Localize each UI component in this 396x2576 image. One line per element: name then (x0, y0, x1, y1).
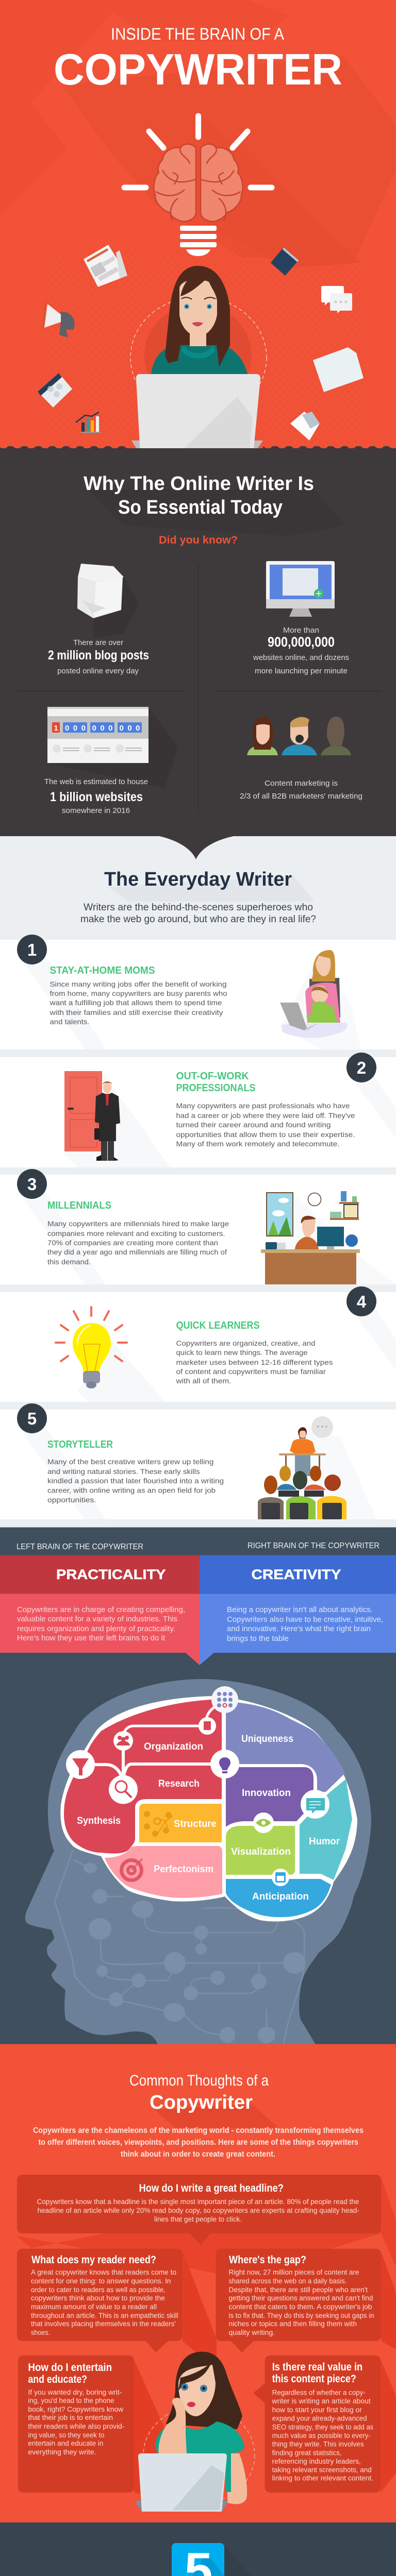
illustration: office desk (261, 1191, 360, 1284)
thought bubble: reader need: A great copywriter knows that readers come to (31, 2268, 176, 2276)
icon: megaphone (42, 301, 74, 337)
icon: paper stack (77, 564, 139, 639)
icon: calendar (38, 373, 72, 408)
text (175, 1320, 333, 1385)
heading: The Everyday Writer (104, 869, 292, 890)
thought bubble: the gap: is to fix that. They do this by seeking out gaps in (229, 2312, 374, 2319)
label: left brain: LEFT BRAIN OF THE COPYWRITER (16, 1543, 143, 1551)
chart: brain map (60, 1686, 357, 1922)
text: opportunities. (47, 1496, 96, 1504)
thought bubble: entertain: their readers while also provid- (28, 2422, 124, 2430)
illustration: thinking woman (135, 2352, 255, 2512)
icon: laptop (135, 2453, 228, 2512)
panel: millennials (0, 1169, 396, 1284)
thought bubble: the gap: quality writing. (229, 2329, 275, 2336)
text: marketer uses between 12-16 different types (176, 1358, 333, 1366)
box: creativity: brings to the table (227, 1634, 289, 1643)
region: structure (139, 1804, 222, 1842)
badge 5: 5 (27, 1409, 37, 1428)
icon: browser counter: 000 (65, 724, 86, 733)
icon: brain (154, 144, 243, 222)
illustration: speaker and audience (258, 1416, 346, 1519)
circuit lines (55, 1850, 304, 2044)
badge 2: 2 (357, 1058, 366, 1077)
text: with their families and still exercise their creativity (49, 1008, 223, 1016)
icon: browser counter: 000 (120, 724, 140, 733)
icon: yellow bulb (56, 1307, 127, 1388)
thought bubble: entertain: ing value, so they seek to (28, 2431, 104, 2439)
illustration: man at door (64, 1071, 120, 1161)
stat: websites: more launching per minute (255, 667, 348, 675)
text: STAY-AT-HOME MOMS (50, 965, 155, 976)
text: and talents. (50, 1018, 90, 1026)
thought bubble: reader need: maximum amount of value to a reader all (31, 2303, 157, 2311)
thought bubble: the gap: content that caters to them. A copywriter's job (229, 2303, 372, 2311)
panel: hero (0, 0, 396, 455)
thought bubble: real value: referencing industry leaders, (272, 2458, 361, 2465)
thought bubble: reader need: content for one thing: to answer questions. In (31, 2277, 171, 2285)
badge 3 (17, 1169, 47, 1199)
thought bubble: real value: Is there real value in (272, 2361, 362, 2373)
stat: blog posts: 2 million blog posts (48, 648, 149, 663)
stat: websites: More than (283, 626, 319, 635)
stat: websites: websites online, and dozens (253, 654, 349, 662)
icon: notebook (271, 247, 299, 276)
text: and writing natural stories. These early skills (47, 1467, 200, 1476)
box: creativity (200, 1555, 396, 1665)
text: from home, many copywriters are busy parents who (50, 989, 227, 997)
text: had a career or job where they were laid off. They've (176, 1111, 355, 1120)
thought bubble: headline: headline of an article while only 20% read body copy, so copywriters are experts at crafting quality head- (37, 2207, 359, 2214)
badge 3: 3 (27, 1175, 37, 1194)
badge 5 (17, 1403, 47, 1433)
box: creativity: CREATIVITY (252, 1567, 341, 1582)
thought bubble: the gap (216, 2249, 381, 2352)
thought bubble: real value: taking relevant screenshots, and (272, 2466, 372, 2474)
icon: browser counter (47, 707, 178, 788)
box: creativity: Copywriters also have to be creative, intuitive, (227, 1615, 383, 1624)
text: opportunities that allow them to use their expertise. (176, 1130, 355, 1139)
brain labels: Visualization (231, 1846, 291, 1857)
heading: So Essential Today (118, 497, 283, 518)
thought bubble: real value: expand your already-advanced (272, 2415, 367, 2422)
brain labels: Perfectonism (154, 1864, 213, 1875)
intro text (80, 902, 316, 925)
icon: lightbulb base (180, 226, 217, 256)
region: anticipation (226, 1879, 331, 1917)
region: synthesis organization research (64, 1699, 222, 1854)
heading: Why The Online Writer Is (84, 473, 314, 495)
text: companies more relevant and exciting to customers. (47, 1229, 225, 1238)
box: practicality: Copywriters are in charge of creating compelling, (17, 1605, 185, 1614)
text: MILLENNIALS (47, 1200, 111, 1211)
panel: stay-at-home moms (0, 935, 396, 1049)
box: practicality: PRACTICALITY (56, 1567, 166, 1582)
text: OUT-OF-WORK (176, 1071, 249, 1082)
panel: out-of-work professionals (0, 1053, 396, 1167)
thought bubble: reader need: What does my reader need? (31, 2254, 156, 2266)
thought bubble: the gap: getting their questions answered and can't find (229, 2294, 373, 2302)
text: this demand. (47, 1258, 91, 1266)
icon: laptop (131, 374, 263, 455)
stat: billion websites: The web is estimated to house (44, 778, 148, 786)
icon: bar chart (76, 412, 101, 433)
brain labels: Uniqueness (241, 1734, 293, 1744)
region: humor (300, 1779, 352, 1880)
thought bubble: the gap: Right now, 27 million pieces of content are (229, 2268, 359, 2276)
heading (84, 473, 314, 518)
text: with all of them. (175, 1377, 231, 1385)
illustration: head silhouette (25, 1679, 371, 2044)
stat: websites (253, 626, 349, 675)
stat: billion websites: 1 billion websites (50, 790, 143, 804)
region: innovation (226, 1767, 314, 1827)
thought bubble: real value: writer is writing an article about (272, 2397, 371, 2405)
text (176, 1071, 355, 1148)
text: QUICK LEARNERS (176, 1320, 260, 1331)
thought bubble: entertain: book, right? Copywriters know (28, 2405, 123, 2413)
intro text: make the web go around, but who are they in real life? (80, 914, 316, 925)
title: INSIDE THE BRAIN OF A (111, 25, 285, 43)
box: practicality: requires organization and plenty of practicality. (17, 1624, 175, 1633)
brain labels: Organization (144, 1741, 203, 1752)
text: career, with online writing as an open field for job (47, 1486, 216, 1494)
brain labels: Anticipation (252, 1891, 309, 1902)
icon: number tile (172, 2542, 224, 2576)
icon: three people (247, 717, 351, 755)
thought bubble: real value (253, 2355, 381, 2493)
text: Many copywriters are past professionals who have (176, 1101, 350, 1110)
title: COPYWRITER (54, 45, 342, 94)
thought bubble: the gap: Where's the gap? (229, 2254, 306, 2266)
intro text: Writers are the behind-the-scenes superheroes who (84, 902, 313, 913)
text: kindled a passion that later flourished into a writing (47, 1477, 224, 1485)
box: creativity: Being a copywriter isn't all about analytics. (227, 1605, 373, 1614)
thought bubble: headline: lines that get people to click. (154, 2215, 242, 2223)
text: of content and copywriters must be familiar (176, 1367, 326, 1376)
region: uniqueness (226, 1702, 345, 1792)
text: PROFESSIONALS (176, 1082, 256, 1094)
text: 70% of companies are creating more content than (47, 1239, 218, 1247)
icon: note page (313, 347, 364, 392)
badge 2 (346, 1053, 376, 1082)
thought bubble: reader need (17, 2249, 183, 2352)
thought bubble: headline: Copywriters know that a headline is the single most important piece of an article. 80% of people read the (37, 2198, 359, 2206)
icon: woman at laptop (131, 266, 263, 455)
heading: Common Thoughts of a (129, 2072, 269, 2089)
text: Since many writing jobs offer the benefit of working (50, 980, 227, 988)
thought bubble: headline (17, 2175, 381, 2245)
panel: quick learners (0, 1286, 396, 1402)
thought bubble: reader need: that involves placing themselves in the readers' (31, 2320, 176, 2328)
box: practicality: valuable content for a variety of industries. This (17, 1615, 177, 1623)
thought bubble: the gap: niches or topics and then filling them with (229, 2320, 357, 2328)
icon: dashed halo (130, 297, 267, 418)
text: STORYTELLER (47, 1439, 113, 1450)
thought bubble: entertain: ing, you'd head to the phone (28, 2397, 114, 2404)
stat: content marketing: 2/3 of all B2B marketers' marketing (240, 792, 362, 801)
thought bubble: real value: finding great statistics, (272, 2449, 342, 2457)
badge 4: 4 (357, 1292, 367, 1311)
thought bubble: reader need: throughout an article. This is an empathetic skill (31, 2312, 178, 2319)
illustration: mom and baby (280, 950, 347, 1038)
thought bubble: entertain: If you wanted dry, boring writ- (28, 2388, 122, 2396)
thought bubble: real value: Regardless of whether a copy- (272, 2389, 366, 2397)
icon: rolled paper (290, 412, 320, 440)
icon: lightbulb rays (124, 116, 272, 188)
stat: websites: 900,000,000 (268, 634, 335, 650)
region: perfectonism (105, 1846, 222, 1898)
box: practicality: Here's how they use their left brains to do it (17, 1634, 166, 1642)
stat: blog posts: posted online every day (57, 667, 139, 675)
intro text: Copywriters are the chameleons of the marketing world - constantly transforming themselves (33, 2126, 364, 2135)
thought bubble: entertain: entertain and educate in (28, 2439, 103, 2447)
thought bubble: reader need: order to cater to readers as well as possible, (31, 2286, 166, 2294)
thought bubble: real value: how to start your first blog or (272, 2406, 362, 2414)
stat: blog posts: There are over (73, 639, 123, 647)
thought bubble: real value: much value as possible to every- (272, 2432, 371, 2439)
text: Many copywriters are millennials hired to make large (47, 1219, 229, 1228)
stat: billion websites: somewhere in 2016 (62, 807, 130, 815)
text (47, 1200, 229, 1266)
text: Many of them work remotely and telecommute. (176, 1140, 339, 1148)
text: want a fulfilling job that allows them to spend time (49, 998, 222, 1007)
icon: newspaper (84, 245, 127, 287)
text: Many of the best creative writers grew up telling (47, 1458, 213, 1466)
text (49, 965, 227, 1026)
thought bubble: reader need: shoes. (31, 2329, 50, 2336)
brain labels: Innovation (242, 1788, 291, 1799)
brain labels: Humor (309, 1836, 340, 1847)
badge 4 (346, 1286, 376, 1316)
subheading: Did you know? (159, 534, 238, 546)
thought bubble: headline: How do I write a great headline? (139, 2182, 284, 2194)
panel: common thoughts (0, 2044, 396, 2522)
text: quick to learn new things. The average (176, 1348, 308, 1357)
panel: why the online writer (0, 446, 396, 836)
region: visualization (226, 1826, 295, 1875)
intro text (33, 2126, 364, 2159)
stat: blog posts (48, 639, 149, 675)
text: they did a year ago and millennials are filling much of (47, 1248, 227, 1256)
brain labels: Structure (174, 1819, 217, 1829)
brain labels (77, 1734, 340, 1902)
box: creativity: and innovative. Here's what the right brain (227, 1624, 371, 1633)
thought bubble: the gap: Despite that, there are still people who aren't (229, 2286, 368, 2294)
panel: storyteller (0, 1403, 396, 1519)
panel: key techniques header (0, 2522, 396, 2576)
title (54, 25, 342, 94)
intro text: think about in order to create great content. (121, 2150, 275, 2159)
badge 1 (17, 935, 47, 964)
text (47, 1439, 224, 1504)
stat: billion websites (44, 778, 148, 815)
box: practicality (0, 1555, 200, 1665)
thought bubble: entertain: and educate? (28, 2374, 87, 2385)
thought bubble: entertain (18, 2355, 134, 2493)
text: turned their career around and found writing (176, 1121, 331, 1129)
brain labels: Research (158, 1778, 200, 1789)
label: right brain: RIGHT BRAIN OF THE COPYWRITER (248, 1541, 380, 1550)
icon: chat bubbles (321, 286, 352, 313)
panel: left and right brain (0, 1527, 396, 2044)
thought bubble: real value: SEO strategy, they seek to add as (272, 2424, 373, 2431)
badge 1: 1 (27, 940, 37, 959)
thought bubble: real value: thing they write. This involves (272, 2441, 364, 2448)
thought bubble: reader need: copywriters think about how to provide the (31, 2294, 165, 2302)
brain icons (66, 1686, 329, 1886)
brain labels: Synthesis (77, 1816, 121, 1826)
heading (129, 2072, 269, 2113)
icon: browser counter: 1 (54, 724, 58, 733)
thought bubble: entertain: everything they write. (28, 2448, 96, 2456)
intro text: to offer different voices, viewpoints, and positions. Here are some of the things copywriters (38, 2138, 358, 2147)
icon: monitor (266, 561, 335, 617)
thought bubble: real value: linking to other relevant content. (272, 2475, 373, 2482)
thought bubble: entertain: that their job is to entertain (28, 2414, 113, 2421)
thought bubble: the gap: shared across the web on a daily basis. (229, 2277, 346, 2285)
heading: Copywriter (150, 2092, 253, 2113)
panel: everyday writer header (0, 836, 396, 940)
stat: content marketing (240, 779, 362, 801)
stat: content marketing: Content marketing is (265, 779, 338, 788)
thought bubble: real value: this content piece? (272, 2373, 356, 2385)
thought bubble: entertain: How do I entertain (28, 2362, 112, 2374)
icon: browser counter: 000 (92, 724, 112, 733)
text: Copywriters are organized, creative, and (176, 1339, 316, 1347)
